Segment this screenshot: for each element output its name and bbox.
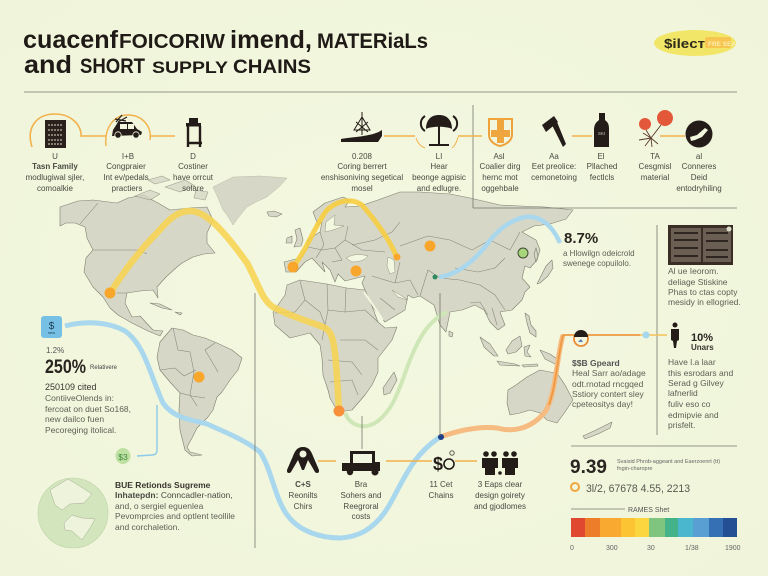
- stat: 9.39: [570, 457, 720, 478]
- stat: 10%: Unars: [691, 343, 714, 352]
- bottom icon labels: Reonilts: [289, 491, 317, 500]
- stat: 9.39: fngin-charopre: [617, 466, 652, 472]
- icon: hammer: [542, 116, 566, 147]
- top icon labels: 0.208: [352, 152, 373, 161]
- icon: oil platform: [341, 112, 382, 142]
- text block: speed: [572, 358, 646, 409]
- icon: ledger: [30, 114, 81, 148]
- coordinates line: 3l/2, 67678 4.55, 2213: [586, 483, 690, 495]
- stat: 9.39: Svaisid Phrob-aggeant and Eaerzoenrt (tt): [617, 459, 720, 465]
- top icon labels: cemonetoing: [531, 173, 577, 182]
- Java: [497, 361, 538, 367]
- text block: regions: BUE Retionds Sugreme: [115, 480, 211, 490]
- route: orange Pacific: [440, 335, 563, 437]
- Sumatra: [480, 337, 498, 356]
- top icon labels: al: [696, 152, 702, 161]
- top icon labels: Conneres: [682, 162, 716, 171]
- text block: photo caption: mesidy in ellogried.: [668, 297, 741, 307]
- top icon labels: Asl: [493, 152, 505, 161]
- bottom icon row: [287, 447, 518, 476]
- top icon labels: hernc mot: [482, 173, 519, 182]
- top icon row: [30, 110, 713, 148]
- text block: photo caption: [668, 266, 741, 307]
- text block: regions: and, o sergiel eguenlea: [115, 501, 204, 511]
- Iceland: [267, 211, 282, 217]
- world map: [60, 176, 612, 456]
- icon: dollar tag: $: [49, 321, 55, 332]
- legend scale: [570, 545, 741, 552]
- top icon labels: Coring berrert: [337, 162, 387, 171]
- top icon labels: Eet preolice:: [532, 162, 576, 171]
- Sri Lanka: [449, 331, 453, 337]
- left callout: 250%: new dailco fuen: [45, 414, 104, 424]
- badge: [654, 30, 736, 56]
- title: [23, 26, 428, 79]
- text block: regions: Pevomprcies and optlent teollile: [115, 511, 235, 521]
- icon: dollar and coin: $: [433, 454, 443, 474]
- top icon labels: Pllached: [587, 162, 617, 171]
- icon: hoist: [287, 447, 319, 473]
- Japan: [537, 260, 553, 284]
- top icon labels: oggehbale: [481, 184, 519, 193]
- left callout: 250%: Relativere: [90, 365, 118, 371]
- bottom icon labels: [289, 480, 526, 521]
- Australia: [507, 370, 573, 423]
- legend colour bar: [571, 518, 737, 537]
- North America: [60, 195, 215, 336]
- icon: wrench disc: [686, 120, 712, 148]
- badge: FRE SEA: [708, 41, 736, 48]
- photo panel: [668, 225, 733, 265]
- text block: users: this esrodars and: [668, 368, 733, 378]
- top icon labels: [26, 152, 722, 193]
- text block: users: [668, 357, 733, 430]
- text block: photo caption: Al ue Ieorom.: [668, 266, 719, 276]
- left callout: 250%: 1.2%: [46, 346, 64, 355]
- top icon labels: enshisoniving segetical: [321, 173, 403, 182]
- Sulawesi: [524, 345, 531, 357]
- badge: green $3: $3: [118, 452, 128, 462]
- text block: users: Serad g Gilvey: [668, 378, 724, 388]
- connector: blue to green badge: [137, 405, 157, 456]
- text block: speed: $$B Gpeard: [572, 358, 620, 368]
- title: FOICORIW: [119, 31, 225, 53]
- top icon labels: practiers: [112, 184, 142, 193]
- text block: users: Have l.a laar: [668, 357, 716, 367]
- top icon labels: Costiner: [178, 162, 208, 171]
- stat: 10%: 10%: [691, 332, 713, 344]
- legend scale: 0: [570, 545, 574, 552]
- top icon labels: Cesgmisl: [639, 162, 672, 171]
- route: blue South Atlantic: [65, 323, 440, 538]
- icon: bottle: SKI: [598, 131, 605, 136]
- top icon labels: Tasn Family: [32, 162, 78, 171]
- icon: bottle: [594, 113, 609, 147]
- route: yellow Americas to Africa: [110, 211, 339, 410]
- badge: $ilecт: [664, 36, 705, 51]
- title: SUPPLY: [152, 58, 229, 77]
- top icon labels: material: [641, 173, 669, 182]
- text block: photo caption: Phas to ctas copty: [668, 287, 738, 297]
- bottom icon labels: Chains: [429, 491, 453, 500]
- country borders: [80, 203, 520, 406]
- text block: photo caption: deliage Stiskine: [668, 277, 728, 287]
- text block: users: edmipvie and: [668, 410, 719, 420]
- top icon labels: Coalier dirg: [480, 162, 520, 171]
- top icon labels: LI: [436, 152, 442, 161]
- legend scale: 30: [647, 545, 655, 552]
- icon: truck: [342, 451, 380, 476]
- Philippines: [525, 313, 536, 337]
- bottom icon labels: Sohers and: [341, 491, 381, 500]
- title: cuacenf: [23, 26, 119, 54]
- icon: shield: [489, 118, 512, 146]
- stat: 8.7%: swenege copuilolo.: [563, 259, 631, 268]
- icon: dollar tag: [41, 316, 62, 338]
- bottom icon labels: Bra: [355, 480, 368, 489]
- badge: green $3: [116, 448, 130, 464]
- Borneo: [506, 336, 522, 354]
- text block: users: lafnerlid: [668, 388, 698, 398]
- connector node: [640, 332, 667, 338]
- stat: 8.7%: [563, 230, 635, 268]
- left callout: 250%: 250%: [45, 357, 86, 378]
- left callout: 250%: Pecoreging itolical.: [45, 425, 116, 435]
- mini map: [38, 478, 108, 548]
- left callout: 250%: [41, 316, 131, 435]
- Madagascar: [383, 372, 397, 395]
- map markers: [104, 240, 528, 440]
- bottom icon labels: costs: [352, 512, 370, 521]
- top icon labels: have orrcut: [173, 173, 214, 182]
- top icon labels: Deid: [691, 173, 707, 182]
- Caribbean: [150, 303, 182, 315]
- bottom icon labels: 11 Cet: [430, 480, 453, 489]
- bottom icon labels: Chirs: [294, 502, 312, 511]
- left callout: 250%: 250109 cited: [45, 382, 97, 392]
- route: green Indian Ocean: [345, 312, 447, 426]
- top icon labels: U: [52, 152, 58, 161]
- Eurasia: [284, 192, 573, 332]
- bottom icon labels: 3 Eaps clear: [478, 480, 523, 489]
- top icon labels: I+B: [122, 152, 134, 161]
- top icon labels: Int ev/pedals: [103, 173, 149, 182]
- title: imend,: [230, 26, 312, 54]
- icon: dollar and coin: [433, 451, 454, 474]
- route: orange line: [549, 335, 640, 405]
- stat: 8.7%: a Hlowilgn odeicrold: [563, 249, 635, 258]
- icon: container: [186, 118, 202, 147]
- text block: users: prisfelt.: [668, 420, 695, 430]
- title: SHORT: [80, 55, 145, 78]
- icon: person: [671, 322, 679, 348]
- top icon labels: and edlugre.: [417, 184, 461, 193]
- dividers: [24, 92, 737, 548]
- stat: 10%: [691, 332, 714, 352]
- legend title: RAMES Shet: [628, 507, 669, 514]
- Greenland: [213, 176, 287, 225]
- text block: speed: cpeteositys day!: [572, 399, 633, 409]
- top icon labels: beonge agpisic: [412, 173, 466, 182]
- text block: users: fuliv eso co: [668, 399, 711, 409]
- route: blue Asia: [439, 217, 560, 277]
- title: MATERiaLs: [317, 30, 428, 53]
- icon: car: [106, 115, 150, 146]
- New Guinea: [540, 350, 560, 364]
- stat: 9.39: 9.39: [570, 457, 607, 478]
- icon: balloon tree: [639, 110, 673, 147]
- top icon labels: mosel: [351, 184, 373, 193]
- legend scale: 300: [606, 545, 618, 552]
- top icon labels: D: [190, 152, 196, 161]
- top icon labels: fectlcls: [590, 173, 614, 182]
- route: yellow Europe: [293, 201, 397, 267]
- seas: [364, 292, 383, 320]
- top icon labels: TA: [650, 152, 660, 161]
- legend scale: 1/38: [685, 545, 699, 552]
- icon: umbrella: [416, 115, 458, 148]
- top icon labels: entodryhiling: [676, 184, 722, 193]
- bottom icon labels: and gjodlomes: [474, 502, 526, 511]
- text block: speed: odt.rnotad rncgqed: [572, 379, 644, 389]
- top icon labels: Hear: [430, 162, 448, 171]
- top icon labels: El: [597, 152, 605, 161]
- stat: 8.7%: 8.7%: [564, 230, 598, 247]
- bottom icon labels: Reegroral: [343, 502, 379, 511]
- icon: dollar tag: new: [48, 330, 55, 335]
- text block: speed: Heal Sarr ao/adage: [572, 368, 646, 378]
- Arctic islands: [135, 176, 208, 200]
- Sakhalin: [534, 248, 538, 262]
- bottom icon labels: C+S: [295, 480, 312, 489]
- icon: people: [482, 451, 518, 475]
- text block: regions: and corchaletion.: [115, 522, 180, 532]
- top icon labels: Congpraier: [106, 162, 146, 171]
- legend title: [571, 507, 669, 514]
- text block: speed: Sstiory contert sley: [572, 389, 645, 399]
- top icon labels: Aa: [549, 152, 559, 161]
- legend scale: 1900: [725, 545, 741, 552]
- title: and: [24, 51, 72, 79]
- South America: [157, 328, 242, 456]
- UK and Ireland: [286, 228, 303, 247]
- bottom icon labels: design goirety: [475, 491, 525, 500]
- New Zealand: [583, 422, 612, 439]
- top icon labels: solare: [182, 184, 204, 193]
- top icon labels: modlugiwal sjler,: [26, 173, 84, 182]
- node: orange ring: [574, 330, 588, 346]
- text block: regions: Inhatepdn: Conncadler-nation,: [115, 490, 233, 500]
- Africa: [273, 280, 397, 412]
- left callout: 250%: ContiiveOlends in:: [45, 393, 114, 403]
- title: CHAINS: [233, 57, 311, 78]
- left callout: 250%: fercoat on duet So168,: [45, 404, 131, 414]
- top icon labels: comoalkie: [37, 184, 74, 193]
- text block: regions: [115, 480, 235, 532]
